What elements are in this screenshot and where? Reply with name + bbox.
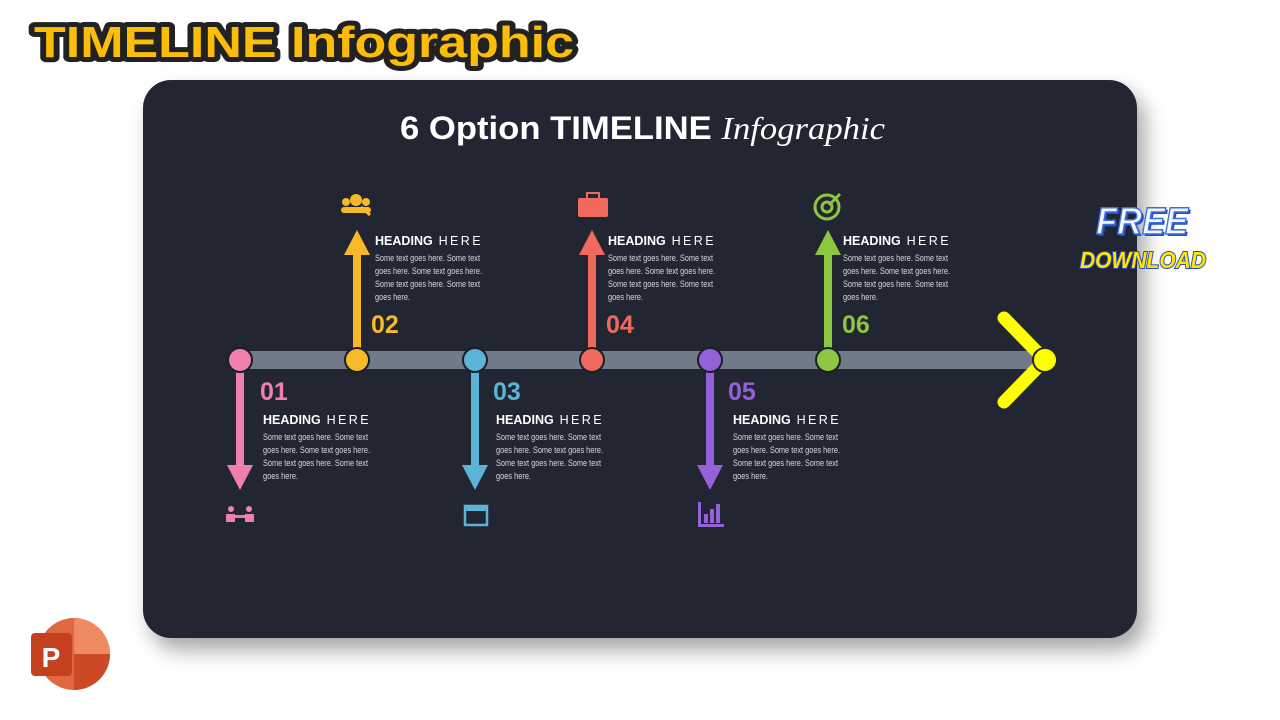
icon: chart: [698, 502, 724, 527]
item 05: goes here. Some text goes here.: [733, 445, 840, 456]
item 06: Some text goes here. Some text: [843, 253, 948, 264]
item 03: [462, 348, 604, 525]
icon: people search: [341, 194, 371, 215]
item 05: HEADING HERE: [733, 412, 841, 427]
main title: TIMELINE Infographic: [34, 18, 574, 67]
item 06: goes here.: [843, 292, 878, 303]
item 04: 04: [606, 311, 634, 339]
item 02: Some text goes here. Some text: [375, 279, 480, 290]
timeline bar: [240, 318, 1057, 402]
icon: powerpoint logo: [31, 618, 110, 690]
item 06: HEADING HERE: [843, 233, 951, 248]
icon: calendar: [465, 506, 487, 525]
panel: slide: [143, 80, 1137, 638]
icon: meeting: [226, 506, 254, 522]
item 05: goes here.: [733, 471, 768, 482]
item 02: Some text goes here. Some text: [375, 253, 480, 264]
item 05: Some text goes here. Some text: [733, 432, 838, 443]
icon: target: [815, 194, 840, 219]
item 06: [815, 194, 951, 372]
item 01: 01: [260, 378, 288, 406]
icon: briefcase: [578, 193, 608, 217]
item 06: goes here. Some text goes here.: [843, 266, 950, 277]
item 06: Some text goes here. Some text: [843, 279, 948, 290]
item 06: 06: [842, 311, 870, 339]
badge: free download: FREE: [1098, 203, 1191, 245]
item 01: goes here. Some text goes here.: [263, 445, 370, 456]
item 02: HEADING HERE: [375, 233, 483, 248]
item 03: goes here. Some text goes here.: [496, 445, 603, 456]
item 04: goes here. Some text goes here.: [608, 266, 715, 277]
item 04: HEADING HERE: [608, 233, 716, 248]
item 02: goes here.: [375, 292, 410, 303]
item 01: Some text goes here. Some text: [263, 432, 368, 443]
item 04: Some text goes here. Some text: [608, 279, 713, 290]
main title: TIMELINE Infographic: [34, 18, 574, 67]
item 01: HEADING HERE: [263, 412, 371, 427]
item 02: [341, 194, 483, 372]
badge: free download: FREE: [1096, 201, 1189, 243]
item 05: [697, 348, 841, 527]
item 02: goes here. Some text goes here.: [375, 266, 482, 277]
item 04: [578, 193, 716, 372]
item 04: goes here.: [608, 292, 643, 303]
item 03: goes here.: [496, 471, 531, 482]
slide title: 6 Option TIMELINE Infographic: [400, 110, 885, 146]
badge: free download: [1080, 201, 1206, 273]
item 03: Some text goes here. Some text: [496, 458, 601, 469]
badge: free download: DOWNLOAD: [1080, 247, 1206, 273]
item 03: HEADING HERE: [496, 412, 604, 427]
item 04: Some text goes here. Some text: [608, 253, 713, 264]
item 03: Some text goes here. Some text: [496, 432, 601, 443]
item 02: 02: [371, 311, 399, 339]
item 01: goes here.: [263, 471, 298, 482]
item 01: [226, 348, 371, 522]
item 05: 05: [728, 378, 756, 406]
item 01: Some text goes here. Some text: [263, 458, 368, 469]
icon: powerpoint logo: P: [42, 642, 60, 673]
item 03: 03: [493, 378, 521, 406]
item 05: Some text goes here. Some text: [733, 458, 838, 469]
